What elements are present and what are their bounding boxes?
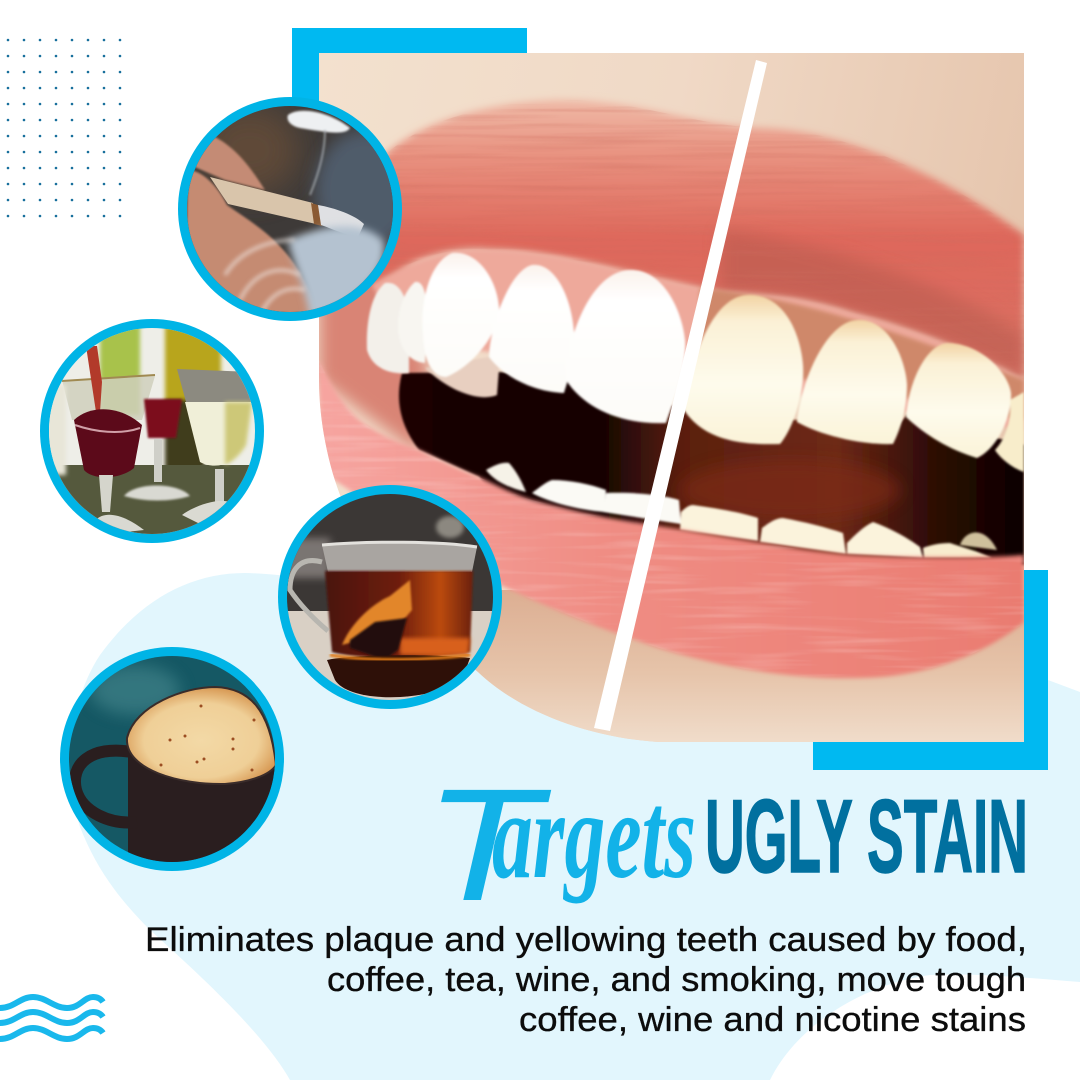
heading [424, 755, 1028, 934]
description text: Eliminates plaque and yellowing teeth caused by food, [145, 921, 1027, 959]
blue frame: top left [292, 28, 527, 110]
lower lip [319, 360, 1024, 678]
description text: coffee, tea, wine, and smoking, move tough [327, 961, 1026, 999]
lower lip texture [324, 425, 1024, 670]
upper teeth: natural side [684, 295, 1024, 472]
description text [145, 921, 1027, 1039]
dot grid decoration [0, 32, 126, 224]
background blob [70, 573, 1080, 1080]
lower teeth [486, 463, 992, 558]
upper lip right shading [720, 230, 1024, 380]
gums [372, 250, 1024, 430]
photo: smile half whitened [319, 53, 1030, 742]
heading script word: T [424, 755, 552, 934]
mouth corner shading [319, 264, 430, 450]
heading script word tail: argets [492, 767, 696, 905]
far right lower tooth [960, 532, 997, 550]
blue frame: bottom right [813, 570, 1048, 770]
back of lower gum [680, 460, 900, 520]
mouth interior [399, 372, 1024, 565]
circle: tea [278, 485, 502, 711]
lower chin skin [475, 590, 1024, 742]
inner tooth backside [425, 355, 500, 397]
skin [319, 53, 1024, 742]
circle: smoking [178, 97, 415, 321]
circle: coffee [60, 647, 285, 875]
circle: red wine [40, 319, 265, 545]
divider line [594, 60, 767, 731]
waves decoration [0, 997, 103, 1039]
description text: coffee, wine and nicotine stains [519, 1001, 1026, 1039]
upper lip [370, 100, 1024, 380]
lip creases [394, 107, 1024, 282]
upper teeth: whitened side [367, 253, 685, 423]
right gums warm [700, 288, 1024, 420]
